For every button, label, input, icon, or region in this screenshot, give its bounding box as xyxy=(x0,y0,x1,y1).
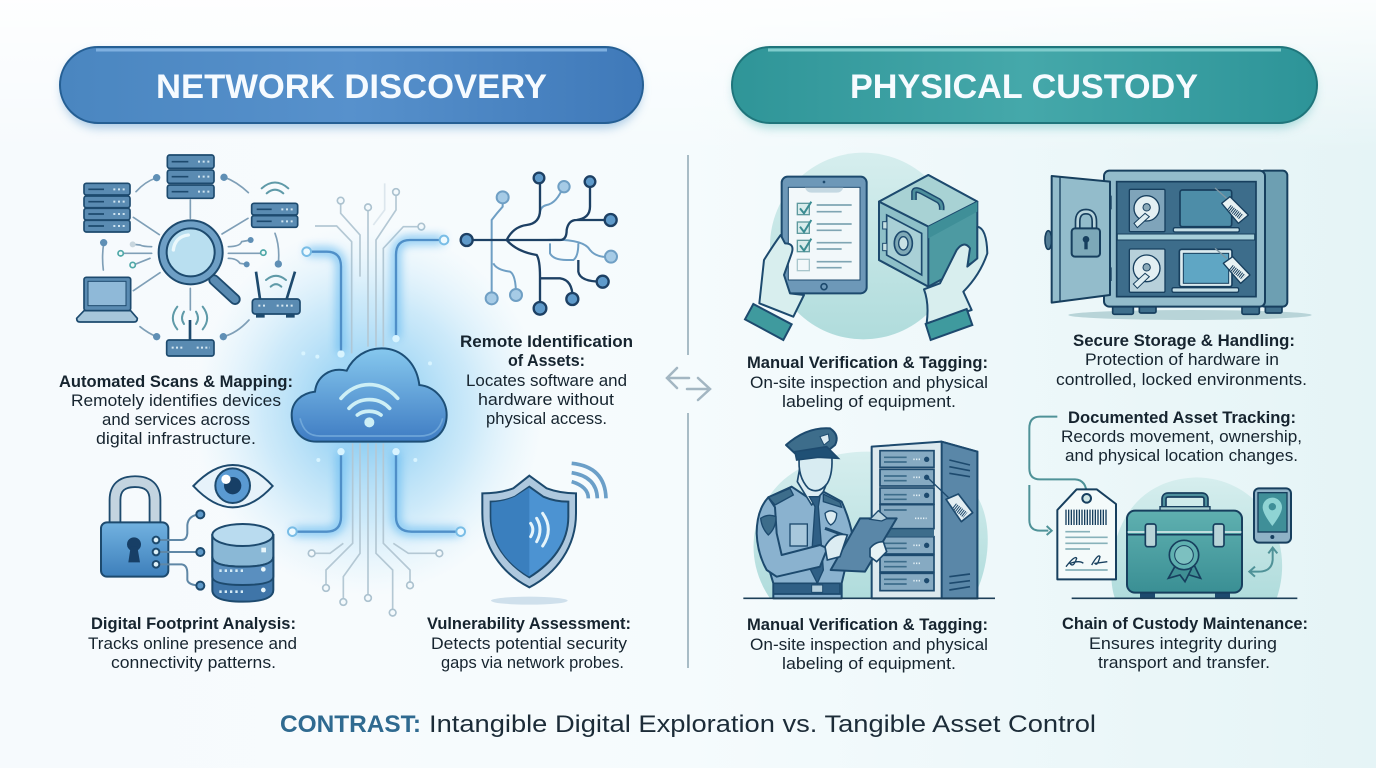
text: manual verification 1: labeling of equipment. xyxy=(782,393,956,411)
central cloud hub with circuit lines xyxy=(193,183,543,616)
item: manual verification, officer xyxy=(743,428,995,673)
icon: branching network tree xyxy=(461,173,617,315)
panel: network discovery xyxy=(59,47,643,672)
text: vulnerability assessment xyxy=(427,615,631,672)
text: digital footprint analysis: Digital Footprint Analysis: xyxy=(91,615,296,633)
text: automated scans and mapping: digital infrastructure. xyxy=(96,430,256,448)
text: automated scans and mapping: Remotely identifies devices xyxy=(71,392,281,410)
text: remote identification: of Assets: xyxy=(508,352,585,370)
text: digital footprint analysis: connectivity patterns. xyxy=(111,654,276,672)
text: secure storage: Protection of hardware in xyxy=(1085,351,1279,369)
item: manual verification and tagging, tablet xyxy=(745,153,988,411)
text: chain of custody maintenance xyxy=(1062,615,1308,672)
text: secure storage xyxy=(1056,332,1307,389)
item: remote identification of assets xyxy=(460,173,633,428)
footer contrast statement: Intangible Digital Exploration vs. Tangible Asset Control xyxy=(429,711,1096,738)
text: vulnerability assessment: gaps via network probes. xyxy=(441,654,624,672)
text: manual verification 1: On-site inspection and physical xyxy=(750,374,988,392)
text: documented asset tracking: and physical location changes. xyxy=(1065,447,1298,465)
icon: padlock, eye and database xyxy=(101,465,273,602)
text: documented asset tracking: Records movement, ownership, xyxy=(1061,428,1302,446)
text: automated scans and mapping xyxy=(59,373,293,448)
text: manual verification 2: labeling of equipment. xyxy=(782,655,956,673)
heading: network discovery: NETWORK DISCOVERY xyxy=(156,68,547,106)
item: digital footprint analysis xyxy=(88,465,297,672)
text: manual verification 2: Manual Verification & Tagging: xyxy=(747,616,988,634)
heading: physical custody xyxy=(732,47,1317,128)
text: automated scans and mapping: and services across xyxy=(102,411,250,429)
text: vulnerability assessment: Detects potential security xyxy=(431,635,628,653)
text: automated scans and mapping: Automated Scans & Mapping: xyxy=(59,373,293,391)
icon: tag, toolbox and locator phone xyxy=(1029,417,1297,599)
text: manual verification 2 xyxy=(747,616,988,673)
text: secure storage: controlled, locked environments. xyxy=(1056,371,1307,389)
center divider with arrows xyxy=(667,155,710,668)
text: remote identification: Locates software and xyxy=(466,372,627,390)
text: digital footprint analysis: Tracks online presence and xyxy=(88,635,297,653)
heading: network discovery xyxy=(60,47,643,128)
item: documented asset tracking xyxy=(1029,409,1302,599)
icon: hands holding tablet and safe xyxy=(745,153,987,340)
text: remote identification: hardware without xyxy=(478,391,614,409)
text: vulnerability assessment: Vulnerability Assessment: xyxy=(427,615,631,633)
panel: physical custody xyxy=(732,47,1317,673)
item: secure storage and handling xyxy=(1045,171,1312,389)
footer contrast statement: CONTRAST: xyxy=(280,711,421,738)
item: automated scans and mapping xyxy=(59,155,300,448)
text: chain of custody maintenance: Ensures integrity during xyxy=(1089,635,1277,653)
text: secure storage: Secure Storage & Handling: xyxy=(1073,332,1295,350)
text: manual verification 1: Manual Verification & Tagging: xyxy=(747,354,988,372)
heading: physical custody: PHYSICAL CUSTODY xyxy=(850,68,1198,106)
text: manual verification 2: On-site inspection and physical xyxy=(750,636,988,654)
item: vulnerability assessment xyxy=(427,463,631,672)
text: manual verification 1 xyxy=(747,354,988,411)
icon: open safe with hardware xyxy=(1045,171,1312,320)
text: chain of custody maintenance: Chain of Custody Maintenance: xyxy=(1062,615,1308,633)
text: remote identification xyxy=(460,333,633,428)
text: remote identification: physical access. xyxy=(486,410,607,428)
icon: magnifier with network devices xyxy=(77,155,300,356)
icon: shield with signal waves xyxy=(482,463,606,605)
icon: officer inspecting server rack xyxy=(743,428,995,598)
text: documented asset tracking: Documented Asset Tracking: xyxy=(1068,409,1296,427)
text: documented asset tracking xyxy=(1061,409,1302,465)
text: remote identification: Remote Identification xyxy=(460,333,633,351)
text: chain of custody maintenance: transport and transfer. xyxy=(1098,654,1270,672)
text: digital footprint analysis xyxy=(88,615,297,672)
